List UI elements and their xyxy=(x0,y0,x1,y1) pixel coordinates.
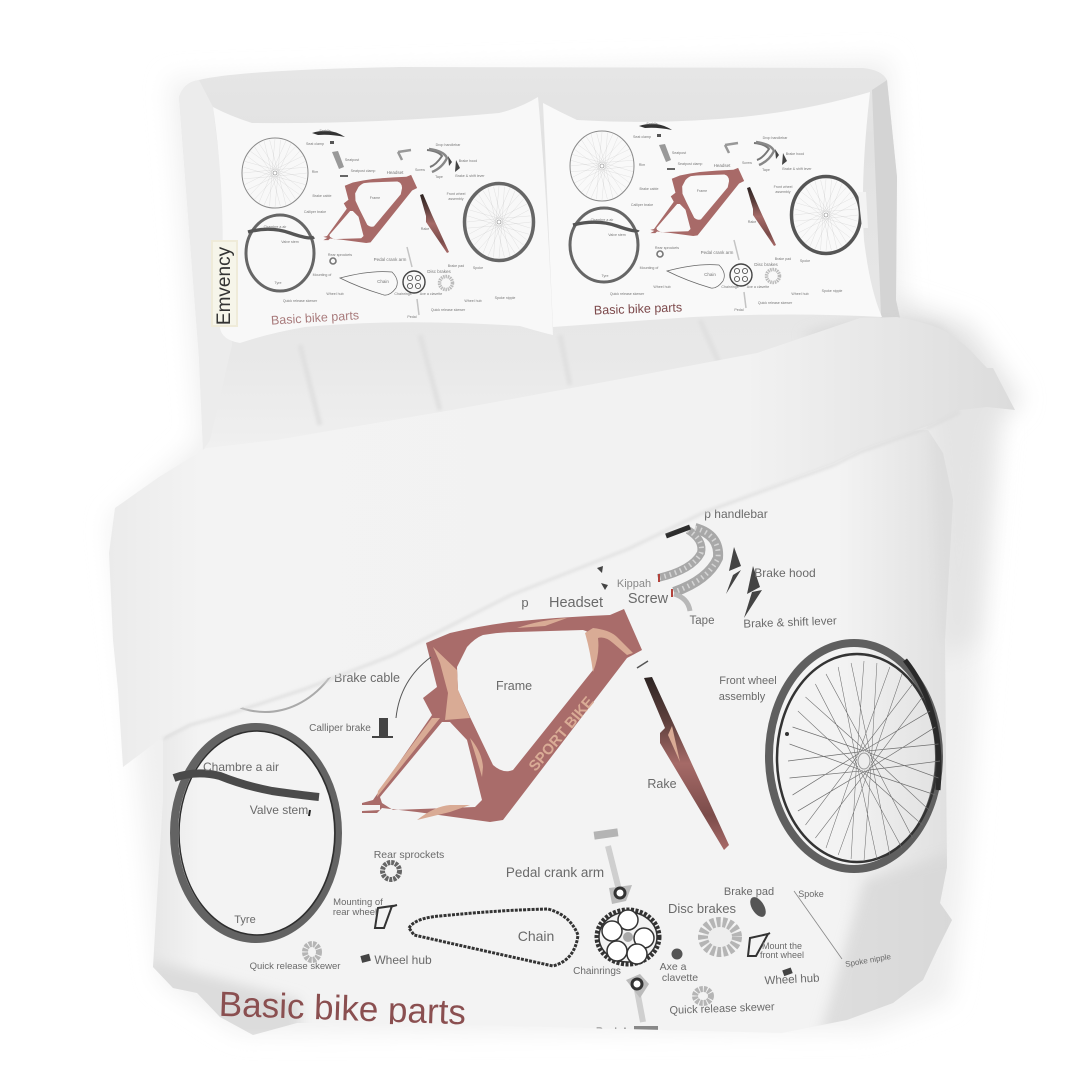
main labels: Frame xyxy=(496,679,532,693)
pillow labels: Tyre xyxy=(274,281,282,285)
stem bolts xyxy=(597,566,608,590)
pillow title: Basic bike parts xyxy=(594,300,682,318)
right pillow xyxy=(543,92,882,327)
rear wheel sliver xyxy=(240,677,331,713)
drivetrain: sprocket, chain, chainring, disc xyxy=(330,247,452,315)
pillow labels: Chain xyxy=(377,279,389,284)
wheel hubs xyxy=(360,954,793,976)
pillow labels: Valve stem xyxy=(281,240,299,244)
pillow labels: Valve stem xyxy=(608,233,626,237)
pillow labels: Wheel hub xyxy=(653,285,671,289)
pillow labels: Tyre xyxy=(602,274,608,278)
spoke line xyxy=(794,891,842,959)
brand tag: Emvency xyxy=(214,246,235,325)
pillow title: Basic bike parts xyxy=(271,308,359,328)
pillow labels: Seatpost clamp xyxy=(351,169,375,173)
main labels: Chambre a air xyxy=(203,760,279,774)
handlebar xyxy=(658,527,718,611)
main labels: Disc brakes xyxy=(668,901,736,916)
pillow labels: Drop handlebar xyxy=(763,136,788,140)
duvet wrinkle shading xyxy=(822,863,949,1025)
pillow labels: Saddle xyxy=(646,122,658,126)
pillow labels: Mounting of xyxy=(313,273,331,277)
pillow labels: Seatpost xyxy=(345,158,359,162)
pillow labels: Brake & shift lever xyxy=(455,174,485,178)
sheet folds under pillows xyxy=(300,320,720,425)
pillow labels: Rake xyxy=(748,220,756,224)
main labels: Tape xyxy=(690,615,714,627)
pillow labels: Brake cable xyxy=(640,187,658,191)
mount the front wheel xyxy=(748,933,770,956)
pillow labels: Chambre a air xyxy=(591,218,614,222)
main labels: Kippah xyxy=(617,578,651,590)
pillow labels: Screw xyxy=(415,168,425,172)
main labels: p handlebar xyxy=(704,507,768,521)
drivetrain: sprocket, chain, chainring, disc xyxy=(657,240,780,308)
pillow labels: Spoke nipple xyxy=(822,289,842,293)
right side shadow xyxy=(880,295,1022,660)
fork highlight xyxy=(668,726,680,762)
tyre and inner tube xyxy=(174,727,338,939)
folded duvet flap xyxy=(109,317,1015,767)
pillow labels: Seat clamp xyxy=(633,135,651,139)
main labels: Rear sprockets xyxy=(374,849,444,861)
front wheel xyxy=(769,643,940,869)
main labels: assembly xyxy=(719,691,766,703)
pillow labels: Mounting of xyxy=(640,266,658,270)
pillow labels: Headset xyxy=(714,163,731,168)
rear sprockets xyxy=(382,862,400,880)
shadow behind flap tip xyxy=(800,320,975,375)
main labels: clavette xyxy=(662,972,698,984)
headset spacer xyxy=(637,661,648,668)
pillow labels: Chain xyxy=(704,272,716,277)
left pillow xyxy=(211,97,553,343)
bed base and top sheet xyxy=(179,67,930,450)
seatpost and clamps xyxy=(657,134,675,170)
pillow labels: Saddle xyxy=(319,129,331,133)
inner tube and tyre xyxy=(570,208,638,282)
pillow labels: Pedal xyxy=(407,315,417,319)
mounting rear wheel xyxy=(375,905,397,928)
main labels: Valve stem xyxy=(250,803,308,817)
front wheel xyxy=(464,184,534,260)
inner tube and tyre xyxy=(246,215,314,291)
main labels xyxy=(203,507,892,1039)
pillow labels: Tape xyxy=(762,168,770,172)
main labels: Brake hood xyxy=(754,566,816,580)
main labels: front wheel xyxy=(760,950,804,960)
pillow labels: Frame xyxy=(697,189,707,193)
main labels: Spoke xyxy=(798,889,824,899)
main labels: Spoke nipple xyxy=(845,952,892,969)
pillow labels: Wheel hub xyxy=(791,292,809,296)
duvet lower left shading xyxy=(154,965,302,1035)
pillow labels xyxy=(264,129,515,319)
main labels: Brake & shift lever xyxy=(743,615,837,631)
pedal crank arm lower xyxy=(626,974,658,1032)
pillow labels: Calliper brake xyxy=(631,203,653,207)
pillow labels: Frame xyxy=(370,196,380,200)
pillow labels: Quick release skewer xyxy=(283,299,318,303)
pillow labels: Wheel hub xyxy=(326,292,344,296)
pillow labels: Rim xyxy=(639,163,645,167)
pillow labels: Disc brakes xyxy=(427,269,451,274)
pillow labels: Rim xyxy=(312,170,318,174)
axe a clavette xyxy=(672,948,682,960)
pillow labels: Screw xyxy=(742,161,752,165)
main labels: Pedal crank arm xyxy=(506,865,604,880)
handlebar and stem xyxy=(725,142,774,165)
pillow labels: assembly xyxy=(775,190,791,194)
fork xyxy=(747,187,776,246)
main labels: Brake pad xyxy=(724,886,774,898)
pillow labels: Seatpost xyxy=(672,151,686,155)
pillow labels: Front wheel xyxy=(447,192,466,196)
main labels: Mounting of xyxy=(333,897,383,908)
pillow artwork: right xyxy=(570,122,860,318)
pillow labels: Rear sprockets xyxy=(328,253,352,257)
main labels: Mount the xyxy=(762,941,802,951)
pillow labels: assembly xyxy=(448,197,464,201)
pillow labels: Tape xyxy=(435,175,443,179)
fork xyxy=(644,677,729,850)
main labels: Wheel hub xyxy=(764,973,820,987)
frame highlights xyxy=(377,618,633,820)
pillow labels: Disc brakes xyxy=(754,262,778,267)
pillow labels: Quick release skewer xyxy=(431,308,466,312)
brake levers xyxy=(775,149,787,165)
front wheel xyxy=(792,176,860,254)
soft shadow around bed xyxy=(110,60,1000,1032)
pillow labels: Pedal xyxy=(734,308,744,312)
pillow labels: Brake & shift lever xyxy=(782,167,812,171)
disc brake rotor xyxy=(703,922,737,952)
brake hoods and levers xyxy=(726,547,762,618)
pillow labels: Brake cable xyxy=(313,194,331,198)
chain xyxy=(409,909,578,966)
frame xyxy=(323,175,417,243)
pillow artwork: left xyxy=(242,129,534,328)
flap seam xyxy=(163,412,960,739)
pillow labels: Chambre a air xyxy=(264,225,287,229)
duvet upper right shading xyxy=(932,430,962,640)
seatpost and clamps xyxy=(330,141,348,177)
main labels: Pedal xyxy=(596,1025,626,1039)
main labels: Headset xyxy=(549,595,603,611)
fork xyxy=(420,194,449,253)
pillow labels: Brake hood xyxy=(459,159,477,163)
handlebar and stem xyxy=(398,149,447,172)
pillow labels xyxy=(591,122,842,312)
pillow labels: Seat clamp xyxy=(306,142,324,146)
pillow labels: Pedal crank arm xyxy=(701,250,734,255)
main labels: Brake cable xyxy=(334,671,400,685)
chainring xyxy=(597,910,659,964)
pillow labels: Brake pad xyxy=(775,257,791,261)
pedal crank arm upper xyxy=(594,828,632,904)
rear wheel xyxy=(242,138,308,208)
main labels: Wheel hub xyxy=(374,953,432,967)
pillow labels: Headset xyxy=(387,170,404,175)
wheel notch at pillow edge xyxy=(858,192,868,228)
pillow labels: Spoke xyxy=(473,266,483,270)
brake cable and calliper xyxy=(372,657,431,738)
saddle xyxy=(639,124,672,130)
main labels: Quick release skewer xyxy=(250,961,340,972)
pillow labels: Chainrings xyxy=(721,285,739,289)
pillow labels: Rear sprockets xyxy=(655,246,679,250)
main labels: Calliper brake xyxy=(309,723,371,734)
pillow labels: Quick release skewer xyxy=(610,292,645,296)
quick release skewers xyxy=(305,944,711,1003)
main labels: Chain xyxy=(518,928,554,944)
saddle xyxy=(312,131,345,137)
frame lettering: SPORT BIKE xyxy=(526,694,598,775)
pillow labels: Spoke nipple xyxy=(495,296,515,300)
main labels: Front wheel xyxy=(719,675,777,687)
pillow labels: Front wheel xyxy=(774,185,793,189)
main labels: Chainrings xyxy=(573,966,621,977)
main title: Basic bike parts xyxy=(218,985,467,1032)
frame xyxy=(650,168,744,236)
pillow labels: Wheel hub xyxy=(464,299,482,303)
duvet artwork xyxy=(174,496,940,1039)
frame xyxy=(362,609,642,822)
brake pad xyxy=(750,897,766,917)
pillow labels: Seatpost clamp xyxy=(678,162,702,166)
pillow labels: Brake pad xyxy=(448,264,464,268)
main labels: Axe a xyxy=(660,961,687,973)
main labels: Screw xyxy=(628,591,669,607)
main labels: Quick release skewer xyxy=(669,1001,775,1017)
pillow labels: Drop handlebar xyxy=(436,143,461,147)
main labels: Rake xyxy=(647,777,677,791)
brand tag xyxy=(211,240,238,327)
main labels: p xyxy=(521,595,529,610)
main labels: Tyre xyxy=(234,914,256,926)
pillow labels: Brake hood xyxy=(786,152,804,156)
pillow labels: Calliper brake xyxy=(304,210,326,214)
brake levers xyxy=(448,156,460,172)
pillow labels: Rake xyxy=(421,227,429,231)
rear wheel xyxy=(570,131,634,201)
pillow labels: Axe a clavette xyxy=(747,285,769,289)
pillow labels: Spoke xyxy=(800,259,810,263)
pillow labels: Quick release skewer xyxy=(758,301,793,305)
pillow labels: Chainrings xyxy=(394,292,412,296)
pillow labels: Pedal crank arm xyxy=(374,257,407,262)
duvet body xyxy=(150,425,962,1040)
pillow labels: Axe a clavette xyxy=(420,292,442,296)
main labels: rear wheel xyxy=(333,907,377,918)
